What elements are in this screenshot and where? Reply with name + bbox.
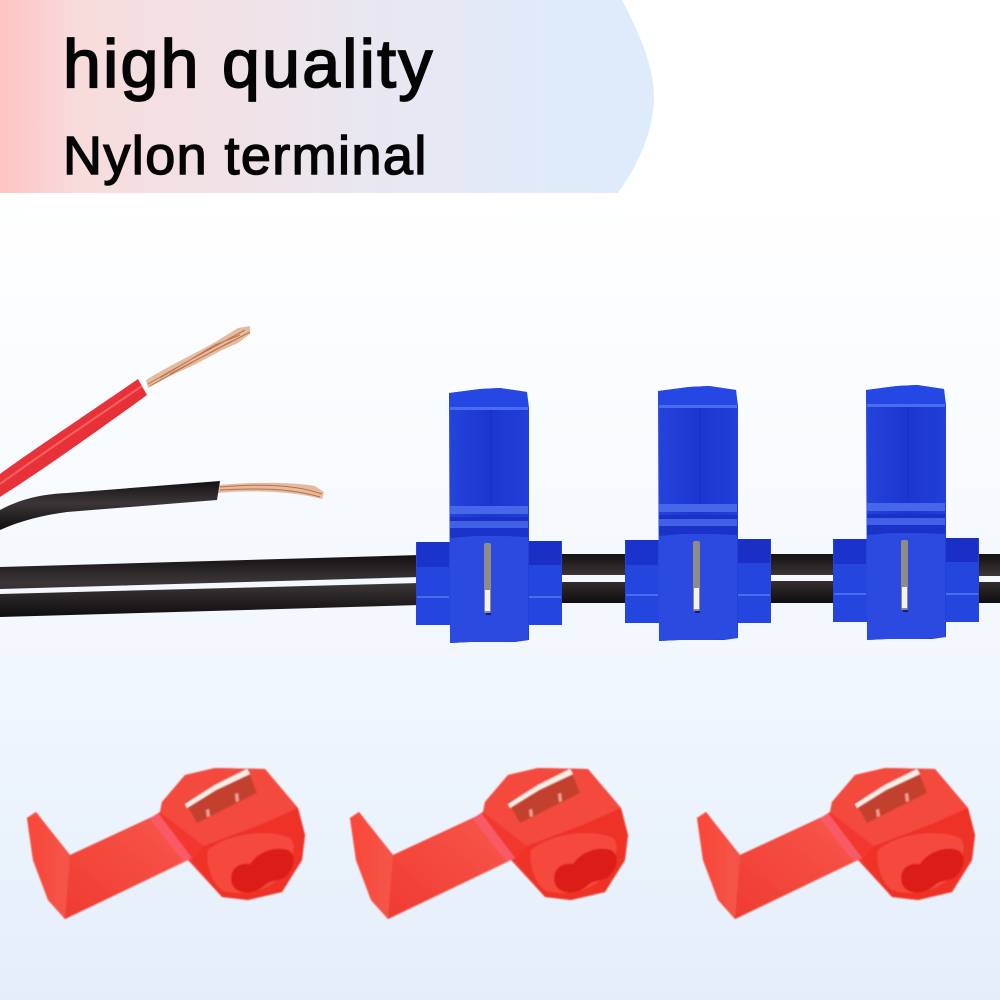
- red connector 2: [350, 768, 628, 919]
- spliced black cables: [0, 554, 1000, 617]
- header banner: [0, 0, 654, 193]
- stripped wires: [0, 326, 324, 530]
- blue connector 2: [625, 386, 771, 641]
- title: high quality: high quality: [63, 26, 435, 102]
- subtitle: Nylon terminal: Nylon terminal: [63, 126, 428, 186]
- red connector 3: [697, 768, 975, 919]
- icon: black wire: [0, 481, 324, 530]
- icon: red wire: [0, 326, 250, 497]
- blue connector 1: [416, 388, 562, 643]
- blue connector 3: [833, 385, 979, 640]
- red connector 1: [27, 768, 305, 919]
